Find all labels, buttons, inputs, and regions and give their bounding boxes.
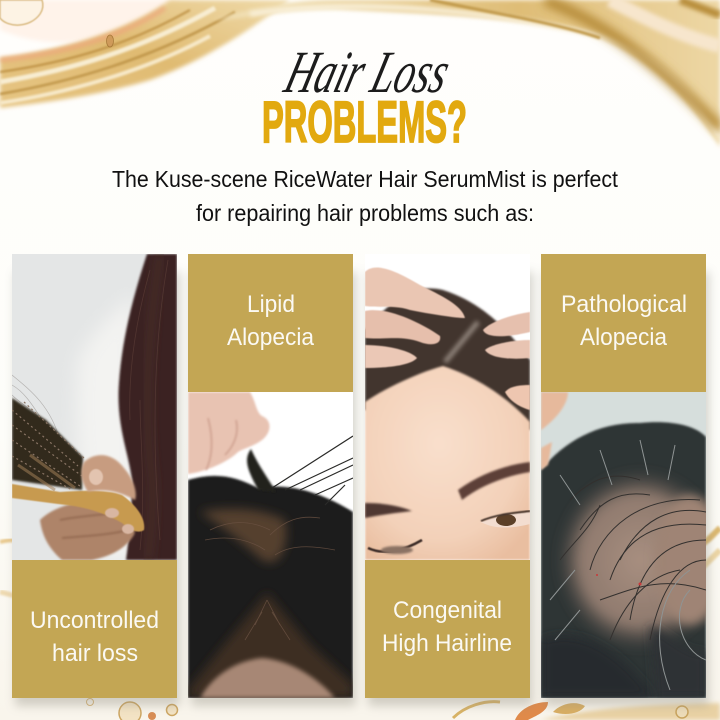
label box: Lipid Alopecia [188, 254, 353, 392]
stray hairs [12, 374, 58, 432]
label box: Congenital High Hairline: High Hairline [382, 630, 512, 657]
label box: Uncontrolled hair loss: Uncontrolled [30, 607, 159, 634]
intro text: for repairing hair problems such as: [196, 200, 534, 226]
label box: Pathological Alopecia [541, 254, 706, 392]
photo: woman's forehead [365, 254, 530, 560]
panel: lipid alopecia [188, 254, 353, 698]
label box: Congenital High Hairline: Congenital [393, 597, 502, 624]
small bead [106, 35, 114, 47]
intro text [112, 166, 619, 226]
title: Hair Loss: Hair Loss [277, 39, 457, 106]
label box: Pathological Alopecia: Alopecia [580, 324, 668, 351]
hand upper [81, 455, 136, 500]
label box: Pathological Alopecia: Pathological [561, 291, 687, 318]
intro text: The Kuse-scene RiceWater Hair SerumMist is perfect [112, 166, 619, 192]
lower background decoration [0, 528, 720, 720]
label box: Lipid Alopecia: Lipid [247, 291, 295, 318]
photo: thinning scalp [541, 392, 720, 698]
top-left golden silk swoosh [0, 0, 290, 108]
droplet [0, 0, 43, 25]
panel: pathological alopecia [541, 254, 720, 698]
label box: Congenital High Hairline [365, 560, 530, 698]
photo: brush and hair [12, 254, 177, 560]
hand lower [40, 501, 135, 560]
photo: oily scalp [188, 392, 353, 698]
label box: Uncontrolled hair loss: hair loss [52, 640, 138, 667]
label box: Lipid Alopecia: Alopecia [227, 324, 315, 351]
top-right golden silk swoosh [215, 0, 720, 147]
panel: congenital high hairline [365, 254, 530, 698]
fingers [365, 268, 465, 318]
panel: uncontrolled hair loss [12, 254, 177, 698]
eyebrows [458, 462, 530, 500]
fist [188, 392, 270, 474]
title: PROBLEMS?: PROBLEMS? [262, 90, 467, 155]
brush head bristles [12, 398, 83, 490]
label box: Uncontrolled hair loss [12, 560, 177, 698]
brush handle [12, 484, 144, 532]
eyes [481, 512, 530, 528]
panel shadows [15, 272, 709, 706]
